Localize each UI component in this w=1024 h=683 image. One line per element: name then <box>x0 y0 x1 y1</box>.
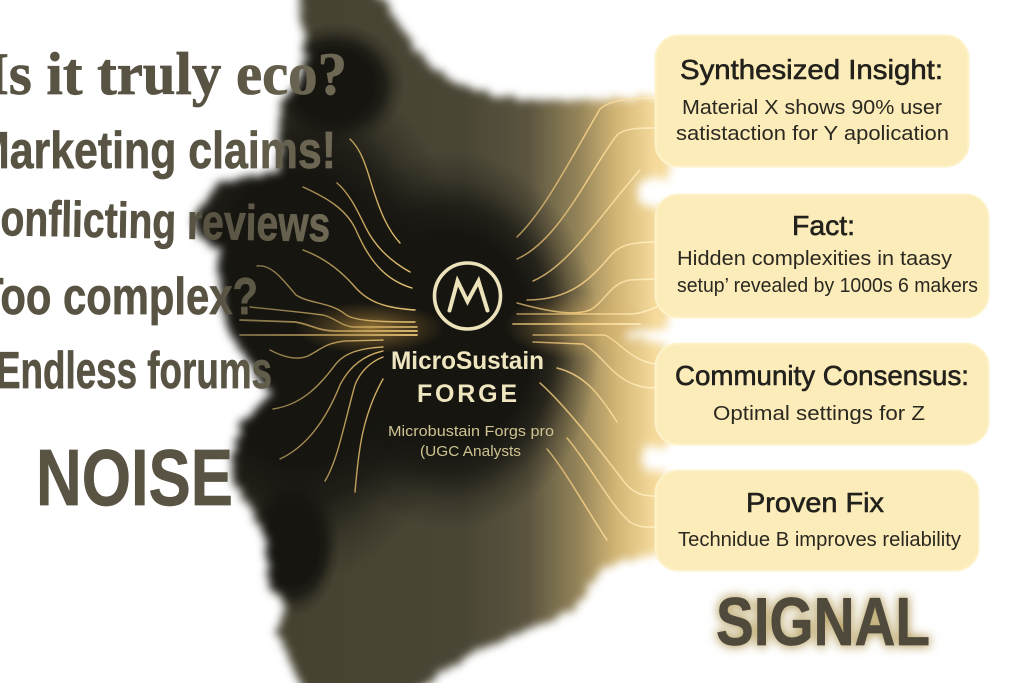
ink blot background <box>186 0 676 683</box>
signal label: SIGNAL <box>716 584 930 660</box>
card: synthesized insight: satistaction for Y apolication <box>676 122 949 145</box>
hub subtitle <box>388 423 554 460</box>
left converging stream lines <box>240 139 417 492</box>
noise complaint: forums: Endless forums <box>0 342 272 400</box>
noise column <box>0 41 347 522</box>
card: proven fix: Technidue B improves reliability <box>678 528 962 551</box>
card: synthesized insight: Synthesized Insight: <box>680 54 943 85</box>
signal label: SIGNAL <box>716 584 930 660</box>
card: fact: Fact: <box>792 210 855 241</box>
card: synthesized insight: Material X shows 90% user <box>682 96 942 119</box>
card: community consensus: Community Consensus: <box>675 360 969 391</box>
card: proven fix <box>656 470 978 570</box>
brand forge: FORGE <box>417 380 517 408</box>
card: proven fix: Proven Fix <box>746 487 884 518</box>
card: fact <box>656 194 988 318</box>
card: fact: setup’ revealed by 1000s 6 makers <box>677 274 978 297</box>
gold glow around the hub <box>295 292 655 360</box>
icon: MicroSustain logo <box>434 263 500 329</box>
hub subtitle: Microbustain Forgs pro <box>388 423 554 440</box>
card: community consensus <box>656 344 988 444</box>
brand name: MicroSustain <box>391 347 544 375</box>
noise label: NOISE <box>36 433 233 522</box>
hub subtitle: (UGC Analysts <box>420 443 521 460</box>
card: fact: Hidden complexities in taasy <box>677 247 953 270</box>
card: synthesized insight <box>656 36 968 166</box>
right diverging stream lines <box>513 98 657 540</box>
central hub <box>388 263 554 460</box>
card: community consensus: Optimal settings for Z <box>713 402 925 425</box>
